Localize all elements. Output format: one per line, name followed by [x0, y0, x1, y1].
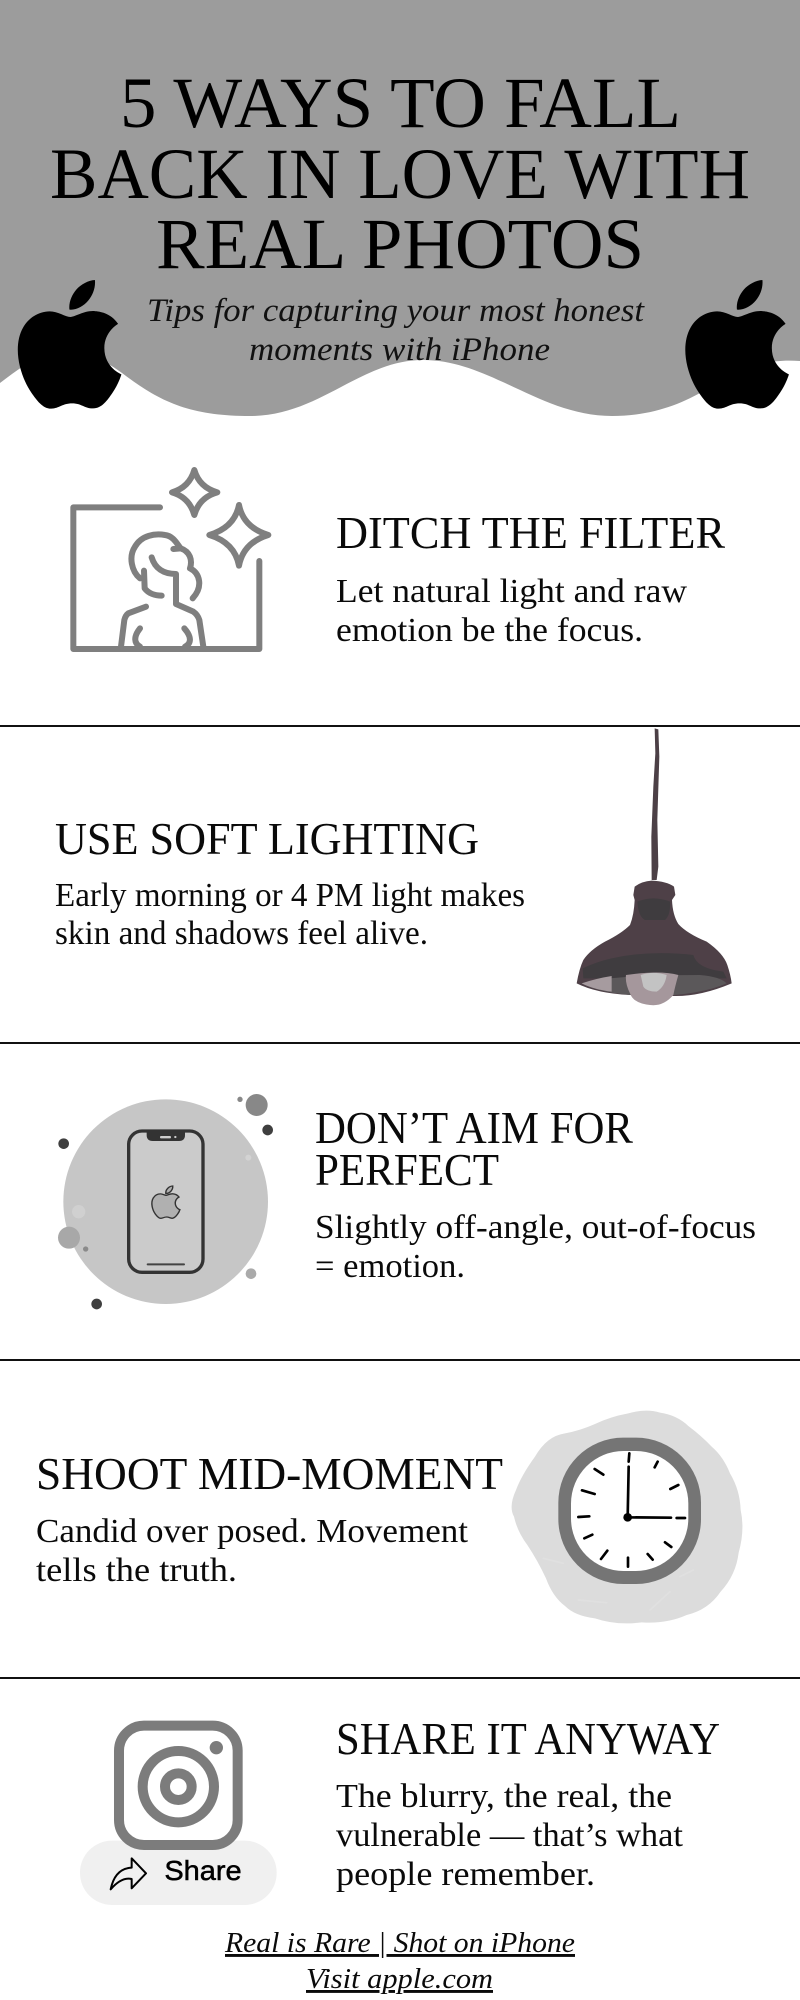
footer: Real is Rare | Shot on iPhone	[224, 1927, 575, 1959]
tip 2 text: Early morning or 4 PM light makes	[55, 877, 525, 914]
clock ticks	[578, 1453, 685, 1567]
title: REAL PHOTOS	[156, 204, 644, 284]
subtitle: Tips for capturing your most honest	[147, 293, 645, 329]
share label: Share	[164, 1855, 242, 1886]
tip 3 text: Slightly off-angle, out-of-focus	[315, 1209, 756, 1246]
tip 3 text: = emotion.	[315, 1248, 465, 1285]
tip 2 text	[55, 877, 525, 952]
footer	[224, 1927, 575, 1995]
tip 3 heading: DON’T AIM FOR	[315, 1102, 633, 1153]
tip 4 text	[36, 1513, 469, 1589]
tip 2 heading: USE SOFT LIGHTING	[55, 813, 479, 864]
tip 5 text: people remember.	[336, 1856, 595, 1893]
tip 3 heading: PERFECT	[315, 1144, 499, 1195]
icon: apple logo right	[685, 280, 789, 409]
phone body	[129, 1131, 203, 1272]
tip 1 text: emotion be the focus.	[336, 612, 643, 649]
subtitle	[147, 293, 645, 368]
title	[50, 63, 750, 284]
header wave background	[0, 0, 800, 416]
tip 1 heading: DITCH THE FILTER	[336, 507, 725, 558]
subtitle: moments with iPhone	[249, 332, 550, 368]
tip 1 text	[336, 573, 687, 649]
tip 3 text	[315, 1209, 756, 1285]
tip 3 heading	[315, 1102, 633, 1195]
tip 5 heading: SHARE IT ANYWAY	[336, 1713, 720, 1764]
icon: pendant lamp	[577, 728, 732, 1005]
footer: Visit apple.com	[306, 1963, 493, 1995]
icon: portrait with sparkles	[73, 470, 268, 649]
icon: apple logo left	[18, 280, 121, 409]
tip 5 text: The blurry, the real, the	[336, 1778, 672, 1815]
icon: share arrow	[111, 1858, 146, 1889]
icon: iPhone in circle with dots	[58, 1094, 273, 1309]
tip 2 text: skin and shadows feel alive.	[55, 915, 428, 952]
tip 4 heading: SHOOT MID-MOMENT	[36, 1448, 503, 1499]
icon: clock on blob	[512, 1411, 742, 1623]
tip 1 text: Let natural light and raw	[336, 573, 687, 610]
tip 4 text: Candid over posed. Movement	[36, 1513, 469, 1550]
tip 4 text: tells the truth.	[36, 1552, 237, 1589]
tip 5 text: vulnerable — that’s what	[336, 1817, 684, 1854]
dots	[58, 1094, 273, 1309]
tip 5 text	[336, 1778, 684, 1893]
icon: Instagram with share pill	[80, 1726, 277, 1905]
title: BACK IN LOVE WITH	[50, 134, 750, 214]
title: 5 WAYS TO FALL	[120, 63, 681, 143]
